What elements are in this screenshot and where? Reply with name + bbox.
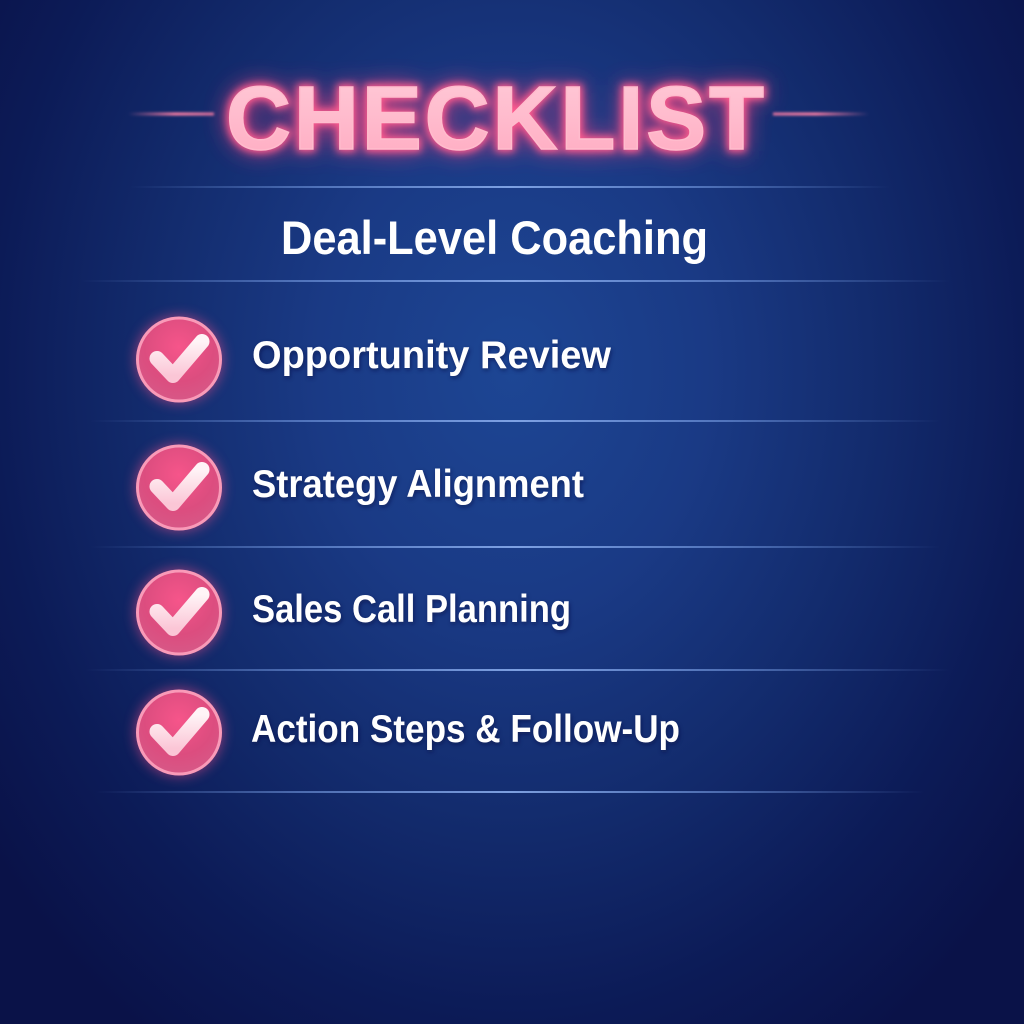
title flare: right (773, 112, 869, 116)
label shadow: Sales Call Planning (253, 590, 572, 633)
subtitle: Deal-Level Coaching (281, 211, 708, 264)
title text: CHECKLIST (226, 69, 764, 169)
divider: row 2 (90, 546, 940, 548)
label: Action Steps & Follow-Up (251, 708, 680, 751)
icon: check badge (135, 316, 223, 404)
label: Sales Call Planning (252, 588, 571, 631)
label shadow: Action Steps & Follow-Up (252, 710, 681, 753)
divider: under title (130, 186, 890, 188)
title inner glow: CHECKLIST (226, 69, 764, 169)
label shadow: Opportunity Review (253, 336, 613, 379)
title (128, 69, 869, 169)
divider: row 4 (95, 791, 925, 793)
icon: check badge (135, 688, 223, 776)
icon: check badge (135, 568, 223, 656)
label: Opportunity Review (252, 334, 612, 377)
item: Action Steps & Follow-Up (135, 688, 681, 776)
divider: row 1 (90, 420, 940, 422)
icon: check badge (135, 444, 223, 532)
title flare: left (128, 112, 214, 116)
label: Strategy Alignment (252, 463, 584, 506)
item: Sales Call Planning (135, 568, 572, 656)
title outer glow: CHECKLIST (226, 69, 764, 169)
label shadow: Strategy Alignment (253, 465, 585, 508)
item: Strategy Alignment (135, 444, 585, 532)
item: Opportunity Review (135, 316, 613, 404)
divider: under subtitle (80, 280, 950, 282)
divider: row 3 (85, 669, 950, 671)
